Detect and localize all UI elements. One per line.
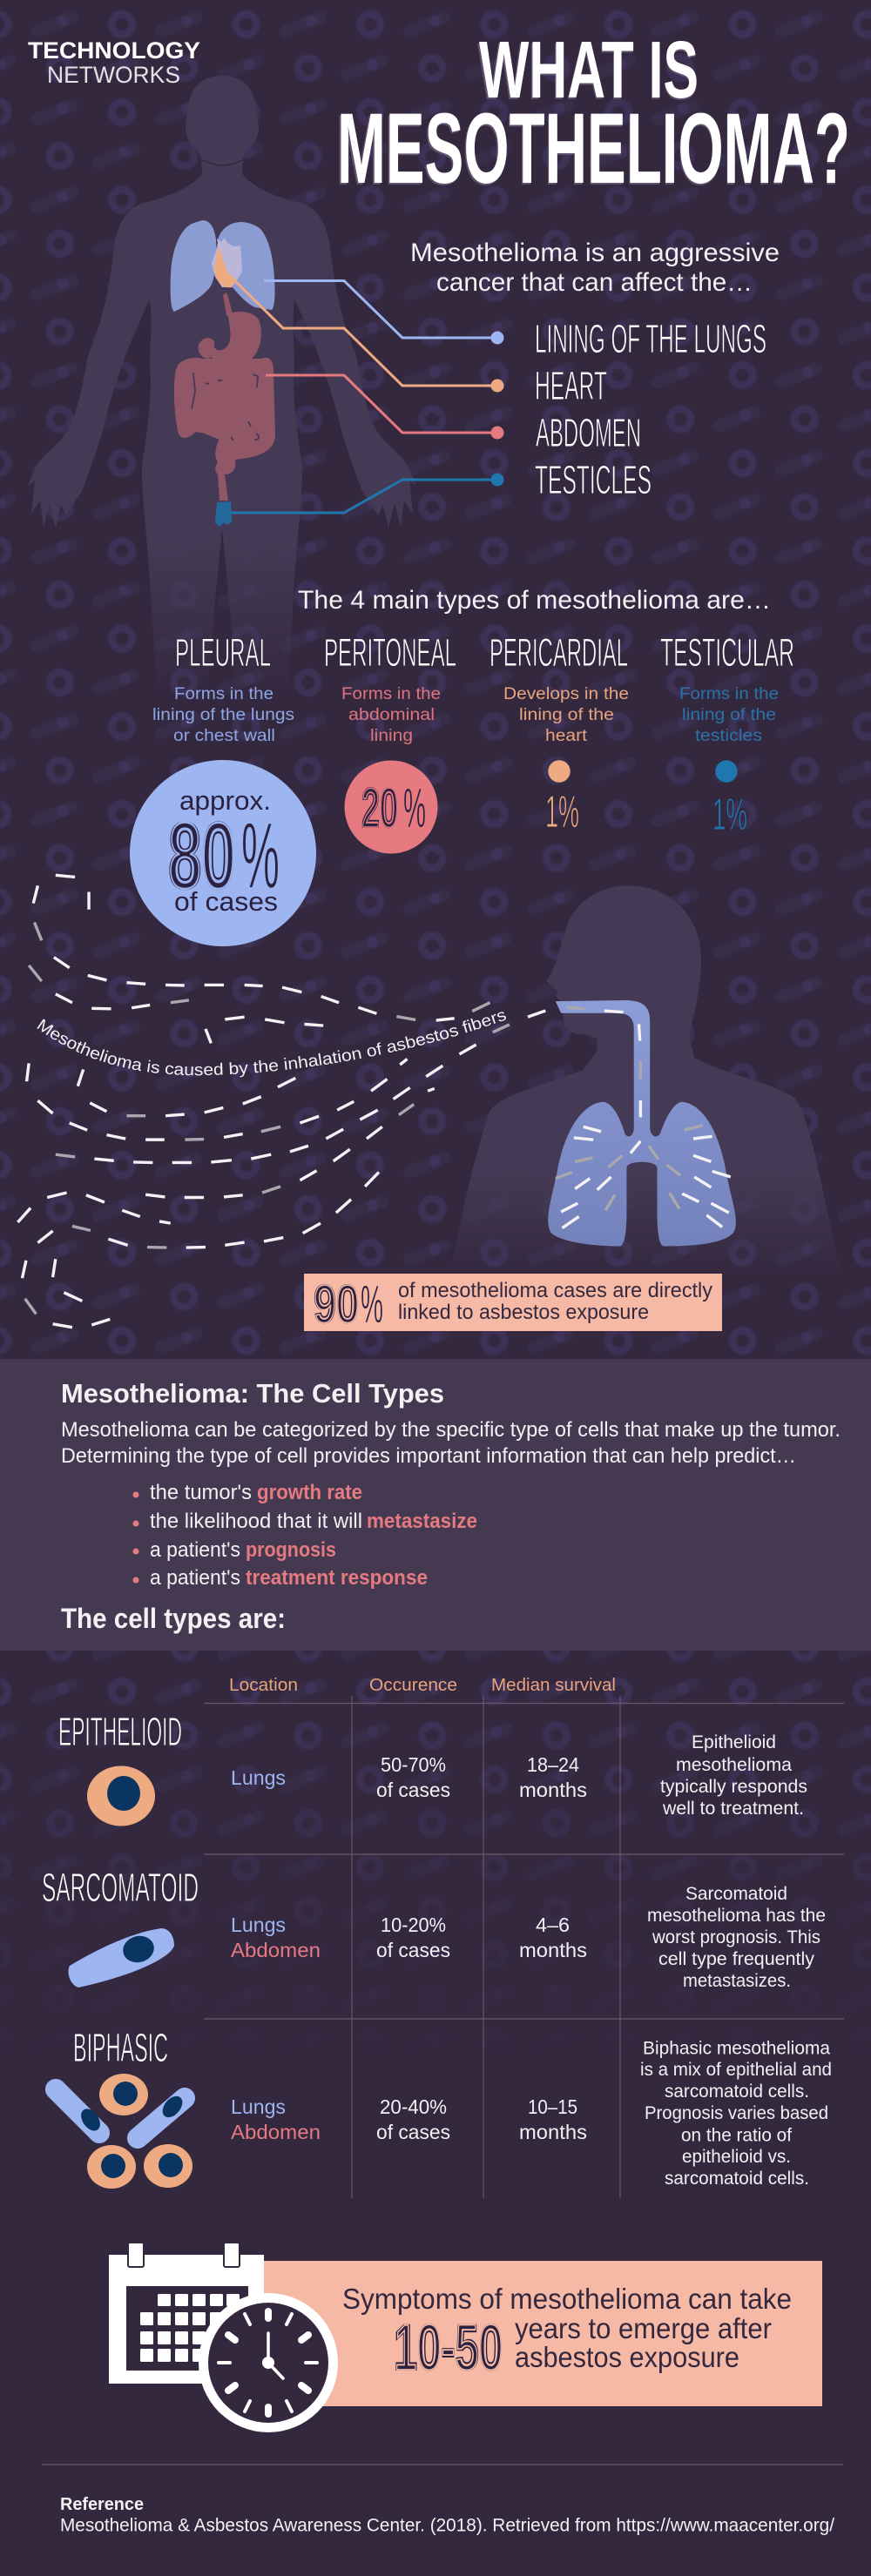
type: pleural: lining of the lungs — [152, 706, 294, 724]
row: sarcomatoid: Lungs — [231, 1914, 286, 1936]
row: sarcomatoid: Abdomen — [231, 1939, 321, 1961]
table header — [229, 1676, 616, 1695]
type: pleural: 80 — [168, 803, 235, 908]
type: pleural: % — [241, 803, 280, 908]
panel: cell types intro: Mesothelioma: The Cell Types — [61, 1378, 444, 1409]
body silhouette — [28, 76, 416, 696]
affected sites list: HEART — [535, 363, 607, 408]
row: biphasic: sarcomatoid cells. — [665, 2169, 809, 2189]
table — [42, 1676, 844, 2198]
row: epithelioid — [58, 1709, 807, 1826]
row: sarcomatoid: worst prognosis. This — [652, 1927, 820, 1947]
callout: 90%: 90 — [314, 1275, 359, 1334]
row: biphasic: epithelioid vs. — [682, 2147, 791, 2167]
title: WHAT IS — [477, 26, 699, 117]
type: pericardial: lining of the — [519, 706, 614, 724]
digestive system — [174, 293, 275, 501]
callout: 90%: of mesothelioma cases are directly — [398, 1279, 712, 1302]
type: peritoneal: 20 — [361, 777, 398, 839]
banner: symptoms — [109, 2243, 822, 2432]
row: biphasic: is a mix of epithelial and — [640, 2060, 832, 2080]
row: epithelioid: months — [519, 1779, 587, 1801]
type: pleural — [130, 630, 316, 946]
row: sarcomatoid: SARCOMATOID — [42, 1865, 199, 1910]
callout: 90%: 90 — [314, 1275, 359, 1334]
banner text — [342, 2283, 792, 2373]
icon: calendar — [109, 2243, 264, 2384]
row: sarcomatoid — [42, 1865, 826, 1991]
row: sarcomatoid: Sarcomatoid — [685, 1884, 787, 1904]
connector: heart — [228, 274, 503, 392]
type: pericardial: Develops in the — [503, 685, 629, 703]
row: biphasic: of cases — [376, 2121, 450, 2143]
row: sarcomatoid: cell type frequently — [658, 1949, 814, 1969]
row: biphasic: Lungs — [231, 2095, 286, 2118]
type: pericardial — [490, 630, 629, 837]
reference — [60, 2495, 834, 2535]
panel: cell types intro: Mesothelioma can be categorized by the specific type of cells that make up the tumor. — [61, 1418, 841, 1442]
panel: cell types intro: The cell types are: — [61, 1603, 286, 1634]
callout: 90%: % — [361, 1275, 383, 1334]
panel: cell types intro — [0, 1359, 871, 1651]
intro text — [410, 239, 780, 297]
callout: 90% — [304, 1274, 722, 1334]
type: pericardial: PERICARDIAL — [490, 630, 628, 675]
bullet list: treatment response — [246, 1566, 428, 1590]
curved caption: Mesothelioma is caused by the inhalation of asbestos fibers — [37, 1012, 506, 1078]
row: biphasic: on the ratio of — [681, 2126, 792, 2145]
type: peritoneal: abdominal — [348, 706, 435, 724]
banner: symptoms: 10-50 — [394, 2311, 503, 2384]
intro text: cancer that can affect the… — [436, 268, 753, 297]
connector: abdomen — [266, 375, 503, 439]
row: sarcomatoid: of cases — [376, 1939, 450, 1961]
row: epithelioid: Epithelioid — [692, 1732, 776, 1752]
connector: testicles — [231, 474, 503, 513]
row: biphasic: Abdomen — [231, 2121, 321, 2143]
row: epithelioid: well to treatment. — [662, 1799, 804, 1819]
testicles — [215, 501, 232, 527]
bullet list: a patient's — [150, 1538, 240, 1562]
panel: cell types intro: Determining the type of cell provides important information that can help predict… — [61, 1444, 796, 1468]
type: peritoneal: % — [403, 777, 426, 839]
title: WHAT IS — [479, 24, 699, 115]
type: pleural: PLEURAL — [175, 630, 271, 675]
row: epithelioid: 18–24 — [527, 1753, 579, 1776]
type: pericardial: heart — [545, 727, 588, 745]
table grid — [204, 1696, 844, 2198]
affected sites list: ABDOMEN — [536, 410, 641, 455]
row: sarcomatoid: months — [519, 1939, 587, 1961]
type: testicular — [660, 630, 794, 840]
type: testicular: testicles — [695, 727, 762, 745]
airway and lungs — [548, 1000, 736, 1247]
type: pleural: approx. — [179, 785, 271, 816]
bullet list: a patient's — [150, 1566, 240, 1590]
table header: Location — [229, 1676, 298, 1695]
table header: Median survival — [491, 1676, 616, 1695]
row: epithelioid: Lungs — [231, 1766, 286, 1789]
type: peritoneal — [324, 630, 456, 853]
bullet list: growth rate — [257, 1481, 362, 1504]
row: epithelioid: mesothelioma — [676, 1755, 792, 1775]
row: epithelioid: typically responds — [660, 1777, 807, 1797]
icon: clock — [199, 2293, 338, 2432]
table header: Occurence — [369, 1676, 457, 1695]
intro text: Mesothelioma is an aggressive — [410, 239, 780, 267]
bullet list: the tumor's — [150, 1481, 252, 1504]
bullet list: the likelihood that it will — [150, 1510, 362, 1533]
reference: Mesothelioma & Asbestos Awareness Center. (2018). Retrieved from https://www.maacenter.org/ — [60, 2516, 834, 2535]
title — [335, 24, 850, 206]
lungs — [171, 220, 275, 312]
bullet list — [132, 1481, 477, 1590]
heart — [212, 238, 242, 287]
type: testicular: lining of the — [682, 706, 776, 724]
row: sarcomatoid: mesothelioma has the — [647, 1906, 826, 1926]
affected sites list — [535, 316, 766, 502]
affected sites list: TESTICLES — [535, 457, 652, 502]
type: peritoneal: lining — [370, 727, 413, 745]
asbestos fibers — [17, 875, 731, 1328]
types heading: The 4 main types of mesothelioma are… — [298, 586, 771, 615]
reference: Reference — [60, 2495, 144, 2514]
row: biphasic: sarcomatoid cells. — [665, 2082, 809, 2102]
row: biphasic — [56, 2025, 832, 2189]
head and lungs figure — [450, 885, 841, 1275]
row: biphasic: Prognosis varies based — [645, 2103, 828, 2123]
type: pleural: 80 — [168, 803, 235, 908]
type: peritoneal: 20 — [361, 777, 398, 839]
row: biphasic: 20-40% — [380, 2095, 447, 2118]
row: epithelioid: of cases — [376, 1779, 450, 1801]
type: testicular: Forms in the — [679, 685, 779, 703]
banner text: Symptoms of mesothelioma can take — [342, 2283, 792, 2315]
row: biphasic: BIPHASIC — [73, 2025, 168, 2070]
callout: 90%: linked to asbestos exposure — [398, 1301, 649, 1324]
logo: NETWORKS — [47, 62, 180, 88]
type: pericardial: 1% — [545, 787, 579, 837]
connector: lungs — [264, 280, 503, 345]
logo — [28, 37, 200, 88]
bullet list: prognosis — [246, 1538, 336, 1562]
bullet list: metastasize — [367, 1510, 477, 1533]
type: testicular: 1% — [712, 790, 747, 840]
organs — [171, 220, 275, 527]
row: biphasic: Biphasic mesothelioma — [643, 2039, 830, 2058]
type: pleural: Forms in the — [174, 685, 273, 703]
row: sarcomatoid: 10-20% — [381, 1914, 446, 1936]
row: biphasic: 10–15 — [528, 2095, 577, 2118]
row: epithelioid: 50-70% — [381, 1753, 446, 1776]
type: pleural: or chest wall — [173, 727, 275, 745]
row: sarcomatoid: metastasizes. — [683, 1971, 791, 1991]
type: peritoneal: Forms in the — [341, 685, 441, 703]
banner text: asbestos exposure — [515, 2341, 739, 2373]
row: sarcomatoid: 4–6 — [536, 1914, 570, 1936]
row: epithelioid: EPITHELIOID — [58, 1709, 182, 1754]
banner: symptoms: 10-50 — [394, 2311, 503, 2384]
logo: TECHNOLOGY — [28, 37, 200, 64]
type: peritoneal: PERITONEAL — [324, 630, 456, 675]
banner text: years to emerge after — [515, 2312, 772, 2344]
row: biphasic: months — [519, 2121, 587, 2143]
biphasic cells — [56, 2074, 192, 2189]
type: pleural: of cases — [174, 886, 278, 917]
